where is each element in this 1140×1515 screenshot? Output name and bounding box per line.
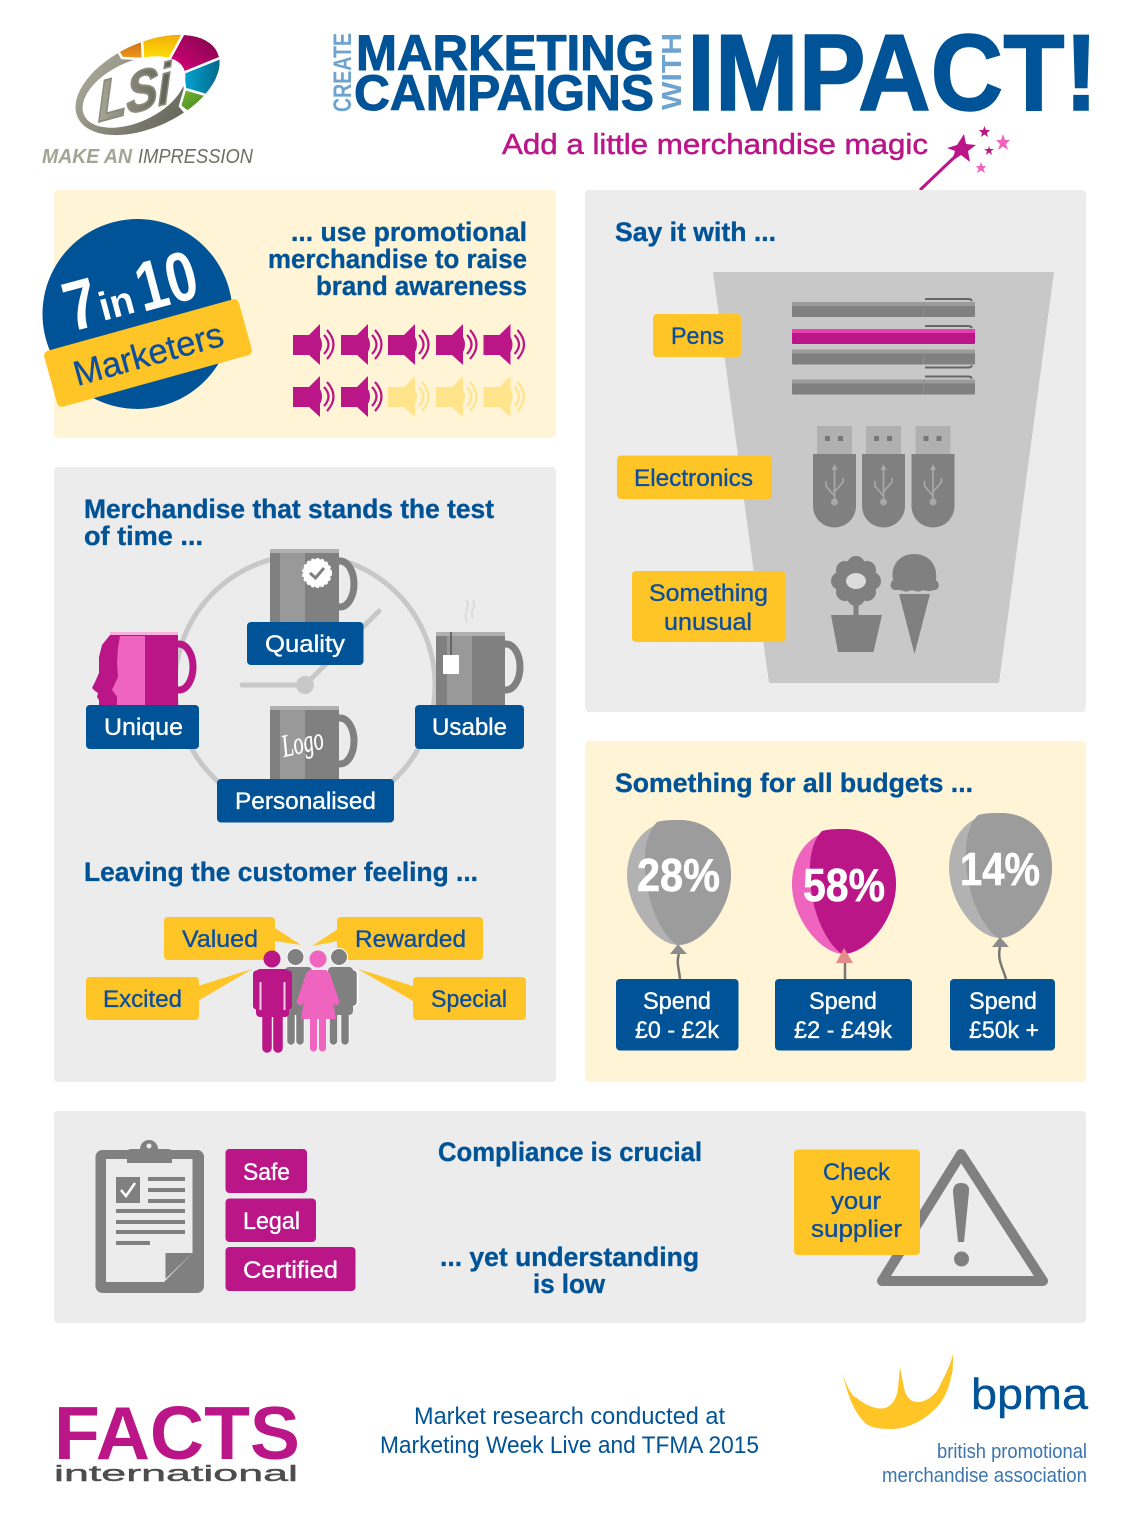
icon: flower in pot [831, 556, 882, 652]
banner: marketers [43, 298, 253, 408]
label: something unusual [632, 571, 786, 642]
tag: certified [226, 1247, 356, 1291]
label: unique: Unique [104, 714, 183, 741]
logo tagline: IMPRESSION [138, 146, 254, 168]
callout: excited: Excited [103, 986, 182, 1013]
heading: Say it with ... [615, 217, 776, 247]
text: use promotional merchandise: merchandise to raise [268, 244, 527, 274]
label: spend 50k plus: £50k + [969, 1017, 1039, 1044]
icon: usb sticks [813, 426, 954, 528]
title [329, 12, 1098, 134]
heading: of time ... [84, 521, 203, 551]
title: CREATE [329, 33, 357, 112]
callout: check your supplier: supplier [811, 1216, 902, 1243]
logo: bpma text: bpma [971, 1370, 1089, 1419]
icon: magic wand [920, 126, 1010, 190]
text: research source: Market research conducted at [414, 1403, 725, 1430]
callout: check your supplier [794, 1150, 920, 1255]
label: personalised [217, 779, 394, 822]
label: spend 50k plus [950, 979, 1055, 1050]
icon: check badge [303, 559, 331, 587]
balloon: 58% [792, 829, 896, 979]
funnel [713, 272, 1054, 683]
label: spend 0 to 2k: Spend [643, 988, 711, 1015]
title: MARKETING [356, 25, 654, 81]
label: personalised: Personalised [235, 788, 376, 815]
logo tagline: MAKE AN [42, 146, 133, 168]
text: use promotional merchandise [268, 217, 527, 301]
panel: compliance [54, 1111, 1086, 1323]
panel: stands the test of time [54, 467, 556, 1082]
text: use promotional merchandise: brand awareness [316, 271, 527, 301]
label: something unusual: Something [649, 580, 768, 607]
tag: legal [226, 1198, 316, 1242]
text: yet understanding is low: ... yet understanding [440, 1242, 699, 1272]
panel: 7 in 10 marketers [42, 190, 556, 438]
callout: valued [164, 917, 301, 960]
panel: say it with [585, 190, 1086, 712]
label: spend 0 to 2k [616, 979, 738, 1050]
subtitle: Add a little merchandise magic [502, 129, 928, 161]
logo: bpma text [882, 1370, 1089, 1487]
callout: check your supplier: your [831, 1188, 881, 1215]
icon: pens [792, 299, 975, 394]
mug: unique [92, 632, 193, 706]
callout: special [358, 969, 526, 1020]
text: research source: Marketing Week Live and TFMA 2015 [380, 1432, 759, 1459]
title: WITH [656, 33, 687, 110]
clock [175, 555, 435, 815]
logo: FACTS International: international [54, 1461, 298, 1486]
balloon: 58%: 58% [803, 859, 885, 911]
title: CAMPAIGNS [354, 65, 654, 121]
badge: 7 in 10: 10 [127, 235, 206, 326]
panel: budgets [585, 741, 1086, 1082]
icon: clipboard [96, 1140, 204, 1293]
label: unique [86, 705, 199, 749]
mug: personalised [270, 706, 354, 780]
text: yet understanding is low: is low [533, 1269, 606, 1299]
text: use promotional merchandise: ... use promotional [291, 217, 527, 247]
logo: bpma text: british promotional [937, 1441, 1087, 1463]
callout: check your supplier: Check [823, 1159, 891, 1186]
mug: quality [270, 549, 354, 623]
logo lettering: LSi [97, 51, 173, 135]
label: spend 2 to 49k: Spend [809, 988, 877, 1015]
balloon: 28% [627, 820, 731, 979]
tag: certified: Certified [243, 1257, 338, 1284]
label: spend 2 to 49k: £2 - £49k [794, 1017, 893, 1044]
label: electronics: Electronics [634, 465, 753, 492]
label: spend 50k plus: Spend [969, 988, 1037, 1015]
banner: marketers: Marketers [69, 315, 228, 394]
text: compliance is crucial: Compliance is crucial [438, 1137, 702, 1167]
chart: speakers 7 of 10 [293, 324, 524, 417]
text: research source [380, 1403, 759, 1459]
logo tagline [42, 146, 254, 168]
heading [84, 494, 494, 551]
label: spend 2 to 49k [775, 979, 912, 1050]
label: electronics [617, 456, 772, 499]
badge: 7 in 10 [42, 219, 232, 409]
label: usable [415, 705, 524, 749]
label: spend 0 to 2k: £0 - £2k [635, 1017, 720, 1044]
label: quality [247, 622, 364, 665]
icon: warning triangle [882, 1154, 1043, 1281]
label: something unusual: unusual [664, 609, 752, 636]
callout: excited [86, 969, 252, 1020]
logo: FACTS International: FACTS [54, 1391, 300, 1475]
logo: LSI [76, 34, 220, 136]
callout: rewarded [312, 917, 483, 960]
mug: usable [436, 600, 520, 706]
heading: Something for all budgets ... [615, 768, 973, 798]
label: usable: Usable [432, 714, 507, 741]
tag: legal: Legal [243, 1208, 300, 1235]
label: pens: Pens [671, 323, 724, 350]
callout: valued: Valued [182, 926, 258, 953]
heading: customer feeling: Leaving the customer feeling ... [84, 857, 478, 887]
label: quality: Quality [265, 631, 345, 658]
title: IMPACT! [687, 12, 1098, 134]
text: yet understanding is low [440, 1242, 699, 1299]
badge: 7 in 10: in [94, 278, 139, 330]
badge: 7 in 10: 7 [55, 263, 107, 346]
balloon: 14% [949, 813, 1052, 979]
tag: safe [226, 1149, 307, 1193]
logo: bpma crown [842, 1354, 953, 1429]
label: pens [653, 314, 741, 357]
logo: bpma text: merchandise association [882, 1465, 1087, 1487]
callout: special: Special [431, 986, 507, 1013]
icon: ice cream [890, 554, 939, 654]
heading: Merchandise that stands the test [84, 494, 494, 524]
mug: personalised: Logo [277, 720, 327, 764]
balloon: 14%: 14% [960, 843, 1040, 895]
tag: safe: Safe [243, 1159, 290, 1186]
icon: group of people [256, 948, 354, 1048]
balloon: 28%: 28% [637, 849, 720, 901]
callout: rewarded: Rewarded [355, 926, 466, 953]
